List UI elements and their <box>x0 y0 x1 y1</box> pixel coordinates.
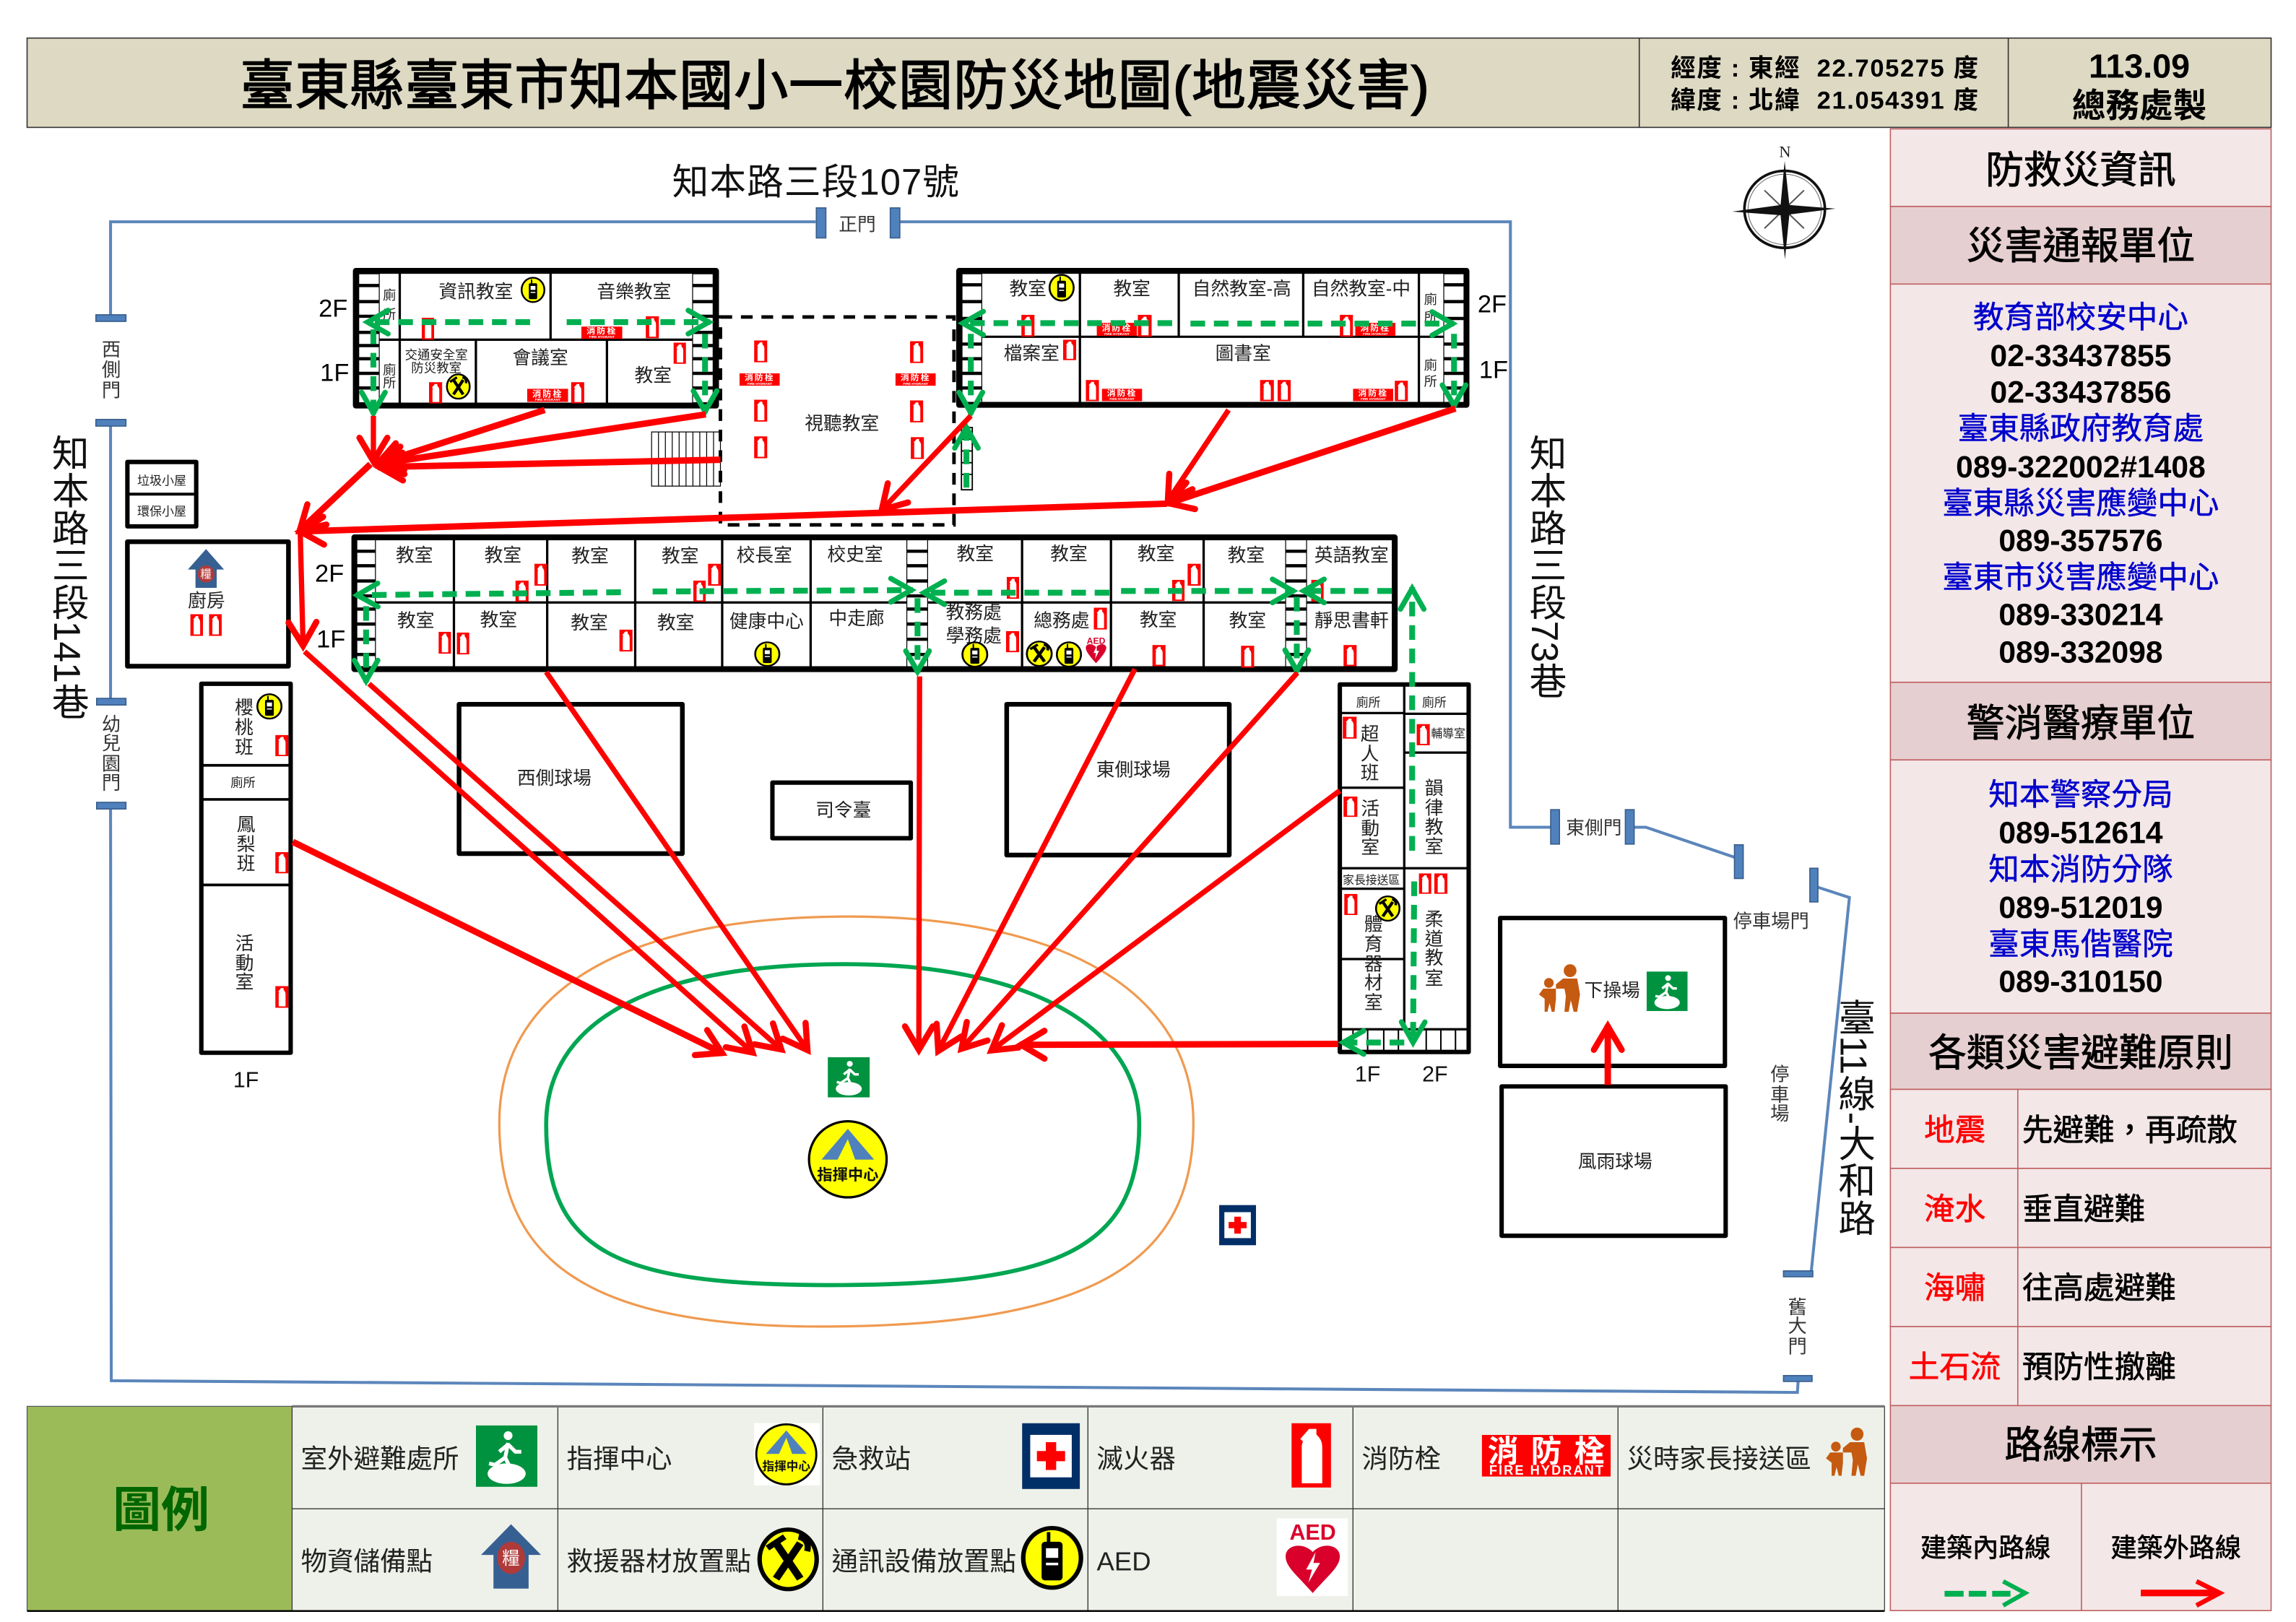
legend title <box>27 1406 292 1610</box>
building: east wing: 2F <box>1422 1062 1448 1087</box>
police fire medical list <box>1890 760 2271 1013</box>
main gate <box>816 208 900 238</box>
building: east wing: 體育器材室 <box>1364 914 1383 1013</box>
reporting units list: 臺東縣災害應變中心 <box>1942 487 2219 521</box>
dashed building: audio-visual classroom: 消防栓 <box>745 373 775 382</box>
reporting units list: 教育部校安中心 <box>1973 300 2188 335</box>
building: northeast wing: FIRE HYDRANT <box>1104 332 1130 336</box>
evacuation principles table: 先避難，再疏散 <box>2022 1113 2237 1148</box>
evacuation principles table: 地震 <box>1924 1113 1985 1148</box>
building: middle wing: 總務處 <box>1034 610 1089 631</box>
building: middle wing: 教室 <box>1138 544 1174 565</box>
parking lot label: 停車場 <box>1770 1063 1790 1124</box>
building: northwest wing: 交通安全室 <box>405 348 468 363</box>
road: east lane: 知本路三段73巷 <box>1524 434 1566 700</box>
building: west kindergarten wing: 廁所 <box>230 776 256 790</box>
road: west lane: 知本路三段141巷 <box>46 434 88 721</box>
legend: hydrant: 消防栓 <box>1488 1434 1605 1469</box>
building: northeast wing: FIRE HYDRANT <box>1109 397 1135 401</box>
legend: parent pickup <box>1626 1428 1867 1476</box>
coordinates: 經度 : 東經 22.705275 度 <box>1671 55 1978 82</box>
building: northwest wing: 會議室 <box>513 347 568 368</box>
reporting units list: 臺東市災害應變中心 <box>1942 560 2219 595</box>
reporting units list: 089-332098 <box>1998 635 2163 669</box>
building: northwest wing: 消防栓 <box>586 326 618 336</box>
legend: hydrant <box>1362 1434 1611 1478</box>
building: middle wing: 中走廊 <box>828 608 885 629</box>
building: northeast wing <box>959 271 1508 405</box>
legend: command center <box>567 1423 820 1486</box>
review stand: 司令臺 <box>815 799 871 820</box>
building: east wing: 輔導室 <box>1431 727 1465 740</box>
building: west kindergarten wing: 活動室 <box>235 933 254 993</box>
building: east wing: 家長接送區 <box>1343 874 1400 887</box>
building: middle wing: 教室 <box>1228 545 1265 566</box>
old main gate: 舊大門 <box>1788 1296 1807 1358</box>
building: northeast wing: 圖書室 <box>1216 343 1271 364</box>
heading: police fire medical: 警消醫療單位 <box>1967 703 2195 745</box>
campus boundary and gates <box>96 208 1850 1392</box>
icon: first aid station <box>1219 1205 1256 1245</box>
building: east wing: 廁所 <box>1356 695 1381 709</box>
building: middle wing: 教室 <box>662 546 698 567</box>
building: east wing <box>1340 685 1469 1087</box>
arrows: indoor evacuation routes <box>356 322 1454 1044</box>
police fire medical list: 知本消防分隊 <box>1988 852 2173 887</box>
building: northwest wing: 消防栓 <box>532 389 563 399</box>
west court <box>459 704 683 854</box>
building: northeast wing: 消防栓 <box>1360 323 1390 333</box>
coordinates <box>1671 55 1978 115</box>
building: northwest wing: FIRE HYDRANT <box>589 335 615 339</box>
lower playground <box>1500 918 1725 1066</box>
building: northwest wing: 1F <box>320 360 349 387</box>
building: middle wing: 教室 <box>657 612 694 633</box>
review stand <box>772 783 911 838</box>
building: west kindergarten wing <box>202 684 290 1093</box>
reporting units list: 089-322002#1408 <box>1956 450 2206 485</box>
evacuation principles table: 海嘯 <box>1924 1271 1985 1306</box>
stairs west of audio-visual classroom <box>651 432 720 486</box>
header bar <box>27 38 2271 127</box>
legend: extinguisher <box>1097 1423 1331 1488</box>
arrows: outdoor evacuation routes <box>293 409 1608 1085</box>
building: middle wing: 教室 <box>397 610 435 631</box>
panel heading: 防救災資訊 <box>1985 149 2176 191</box>
legend <box>27 1406 1884 1611</box>
road names <box>46 161 1875 1236</box>
legend title: 圖例 <box>113 1483 209 1538</box>
building: middle wing: 教室 <box>396 545 433 566</box>
reporting units list: 089-357576 <box>1998 524 2163 558</box>
building: middle wing <box>315 537 1395 669</box>
police fire medical list: 臺東馬偕醫院 <box>1988 927 2173 962</box>
east side gate <box>1551 810 1634 844</box>
legend: communications: 通訊設備放置點 <box>832 1547 1016 1577</box>
building: middle wing: 教室 <box>1140 610 1177 630</box>
legend: rescue equipment <box>567 1530 817 1589</box>
building: east wing: 1F <box>1355 1062 1380 1087</box>
icon: assembly point <box>828 1057 870 1098</box>
kitchen <box>127 542 288 666</box>
route key <box>1890 1483 2271 1610</box>
sheds: garbage and recycling <box>127 462 196 526</box>
evacuation principles table <box>1890 1089 2271 1405</box>
compass <box>1732 142 1835 259</box>
compass: N <box>1779 142 1790 160</box>
legend: parent pickup: 災時家長接送區 <box>1626 1444 1811 1474</box>
running track <box>499 916 1193 1327</box>
building: east wing: 活動室 <box>1361 798 1379 858</box>
building: northeast wing: 消防栓 <box>1107 388 1137 398</box>
parking gate: 停車場門 <box>1733 911 1809 932</box>
courts <box>459 704 1725 1236</box>
kindergarten gate: 幼兒園門 <box>102 714 121 794</box>
date and maker: 113.09 <box>2089 48 2190 85</box>
reporting units list: 臺東縣政府教育處 <box>1958 412 2204 446</box>
icon: command center: 指揮中心 <box>817 1166 878 1184</box>
building: northeast wing: 廁所 <box>1424 357 1437 389</box>
road names: 知本路三段107號 <box>672 161 959 202</box>
building: east wing: 韻律教室 <box>1425 778 1444 857</box>
building: northeast wing: FIRE HYDRANT <box>1363 332 1388 336</box>
building: northeast wing: 廁所 <box>1424 292 1437 324</box>
building: middle wing: 教室 <box>1229 610 1266 631</box>
building: northwest wing: 廁所 <box>383 287 396 321</box>
reporting units list: 089-330214 <box>1998 598 2163 633</box>
building: northwest wing <box>319 271 716 406</box>
building: west kindergarten wing: 櫻桃班 <box>235 698 254 758</box>
heading: evacuation principles <box>1890 1013 2271 1089</box>
panel heading <box>1890 129 2271 207</box>
lower playground: 下操場 <box>1585 980 1640 1001</box>
building: northwest wing: FIRE HYDRANT <box>535 398 560 402</box>
date and maker: 總務處製 <box>2072 87 2206 124</box>
dashed building: audio-visual classroom: FIRE HYDRANT <box>747 382 772 386</box>
legend: command center: 指揮中心 <box>567 1444 672 1474</box>
building: northeast wing: 消防栓 <box>1358 388 1388 398</box>
legend: AED <box>1097 1518 1348 1596</box>
building: middle wing: 2F <box>315 560 344 587</box>
west court: 西側球場 <box>517 768 592 789</box>
parking gate <box>1733 845 1818 932</box>
icon: AED: AED <box>1087 636 1106 646</box>
building: northwest wing: 2F <box>319 295 347 322</box>
reporting units list: 02-33437855 <box>1990 339 2171 373</box>
building: west kindergarten wing: 1F <box>233 1068 259 1093</box>
east side gate: 東側門 <box>1566 817 1621 838</box>
legend: communications <box>832 1528 1081 1587</box>
icon: storage <box>188 549 224 588</box>
west side gate <box>96 315 126 426</box>
police fire medical list: 089-512614 <box>1998 816 2163 851</box>
building: northeast wing: 1F <box>1479 357 1508 384</box>
dashed building: audio-visual classroom <box>720 317 954 525</box>
building: northeast wing: 自然教室-中 <box>1312 279 1411 300</box>
icon: AED <box>1086 636 1106 663</box>
heading: police fire medical <box>1890 682 2271 760</box>
icon: storage: 糧 <box>201 568 212 581</box>
legend: outdoor shelter <box>301 1426 537 1487</box>
legend: command center: 指揮中心 <box>762 1460 810 1473</box>
evacuation principles table: 預防性撤離 <box>2022 1350 2176 1385</box>
legend: extinguisher: 滅火器 <box>1097 1444 1176 1474</box>
building: northeast wing: 教室 <box>1113 279 1151 300</box>
building: middle wing: 英語教室 <box>1314 545 1389 566</box>
legend: supply storage: 物資儲備點 <box>301 1547 433 1577</box>
building: middle wing: 校史室 <box>827 545 883 565</box>
legend: AED: AED <box>1097 1547 1151 1577</box>
building: northwest wing: 教室 <box>634 365 672 386</box>
legend: rescue equipment: 救援器材放置點 <box>567 1547 751 1577</box>
police fire medical list: 089-512019 <box>1998 890 2163 925</box>
building: middle wing: 1F <box>316 626 345 654</box>
dashed building: audio-visual classroom: 視聽教室 <box>805 413 879 434</box>
evacuation principles table: 垂直避難 <box>2022 1192 2145 1227</box>
building: middle wing: 教室 <box>571 546 609 567</box>
legend cells <box>27 1406 1884 1611</box>
kitchen: 廚房 <box>188 591 225 612</box>
arrow: indoor route sample <box>1944 1582 2025 1605</box>
kindergarten gate <box>97 698 126 809</box>
small stairs <box>961 428 972 490</box>
building: east wing: 超人班 <box>1361 724 1379 784</box>
legend: AED: AED <box>1289 1520 1336 1545</box>
sheds: garbage and recycling: 垃圾小屋 <box>137 474 186 487</box>
dashed building: audio-visual classroom: 消防栓 <box>901 373 931 382</box>
building: east wing: 柔道教室 <box>1425 910 1444 989</box>
building: middle wing: 教務處 <box>946 602 1002 623</box>
building: middle wing: 教室 <box>480 610 517 630</box>
legend: first aid <box>832 1423 1080 1489</box>
rain court <box>1502 1086 1725 1236</box>
main gate: 正門 <box>839 214 876 235</box>
title: 臺東縣臺東市知本國小一校園防災地圖(地震災害) <box>240 55 1429 116</box>
coordinates: 緯度 : 北緯 21.054391 度 <box>1671 87 1978 115</box>
legend: hydrant: FIRE HYDRANT <box>1489 1462 1603 1478</box>
heading: route key: 路線標示 <box>2005 1424 2157 1467</box>
evacuation principles table: 土石流 <box>1909 1350 2001 1385</box>
building: northeast wing: 消防栓 <box>1102 323 1132 333</box>
building: northwest wing: 音樂教室 <box>597 282 671 303</box>
rain court: 風雨球場 <box>1578 1151 1652 1172</box>
old main gate <box>1783 1271 1813 1382</box>
heading: reporting units <box>1890 207 2271 284</box>
building: middle wing: 教室 <box>957 544 994 565</box>
police fire medical list: 知本警察分局 <box>1988 778 2173 812</box>
right panel: disaster information <box>1890 129 2271 1610</box>
building: middle wing: 教室 <box>1050 544 1088 565</box>
heading: evacuation principles: 各類災害避難原則 <box>1928 1032 2233 1075</box>
east court: 東側球場 <box>1096 760 1171 781</box>
legend: hydrant: 消防栓 <box>1362 1444 1441 1474</box>
heading: reporting units: 災害通報單位 <box>1967 225 2195 268</box>
police fire medical list: 089-310150 <box>1998 965 2163 999</box>
sheds: garbage and recycling: 環保小屋 <box>137 505 186 519</box>
building: middle wing: 靜思書軒 <box>1314 610 1389 631</box>
building: northeast wing: 自然教室-高 <box>1192 279 1291 300</box>
building: northeast wing: 檔案室 <box>1004 343 1060 364</box>
east court <box>1007 704 1229 855</box>
building: middle wing: 教室 <box>571 612 608 633</box>
reporting units list <box>1890 284 2271 682</box>
date and maker <box>2072 48 2206 124</box>
reporting units list: 02-33437856 <box>1990 375 2171 409</box>
building: northwest wing: 廁所 <box>383 362 396 391</box>
building: middle wing: 校長室 <box>737 545 792 566</box>
building: northeast wing: 教室 <box>1010 279 1047 300</box>
building: northeast wing: 2F <box>1478 290 1507 318</box>
heading: route key <box>1890 1405 2271 1483</box>
legend: outdoor shelter: 室外避難處所 <box>301 1444 459 1474</box>
evacuation principles table: 淹水 <box>1924 1192 1985 1227</box>
building: northwest wing: 防災教室 <box>411 361 462 376</box>
route key: 建築外路線 <box>2111 1532 2241 1562</box>
legend: first aid: 急救站 <box>832 1444 911 1474</box>
evacuation principles table: 往高處避難 <box>2022 1271 2176 1306</box>
legend: supply storage <box>301 1525 541 1589</box>
legend: supply storage: 糧 <box>502 1549 520 1569</box>
road: provincial highway: 臺11線-大和路 <box>1833 999 1875 1236</box>
west side gate: 西側門 <box>102 339 121 402</box>
route key: 建築內路線 <box>1920 1532 2050 1562</box>
building: west kindergarten wing: 鳳梨班 <box>237 815 256 874</box>
building: east wing: 廁所 <box>1422 695 1447 709</box>
building: middle wing: 學務處 <box>946 625 1002 646</box>
building: middle wing: 教室 <box>485 545 521 566</box>
arrow: outdoor route sample <box>2141 1582 2220 1605</box>
building: northeast wing: FIRE HYDRANT <box>1361 397 1386 401</box>
icon: command center <box>809 1122 887 1197</box>
dashed building: audio-visual classroom: FIRE HYDRANT <box>903 382 928 386</box>
building: northwest wing: 資訊教室 <box>438 282 513 303</box>
building: middle wing: 健康中心 <box>729 611 804 632</box>
